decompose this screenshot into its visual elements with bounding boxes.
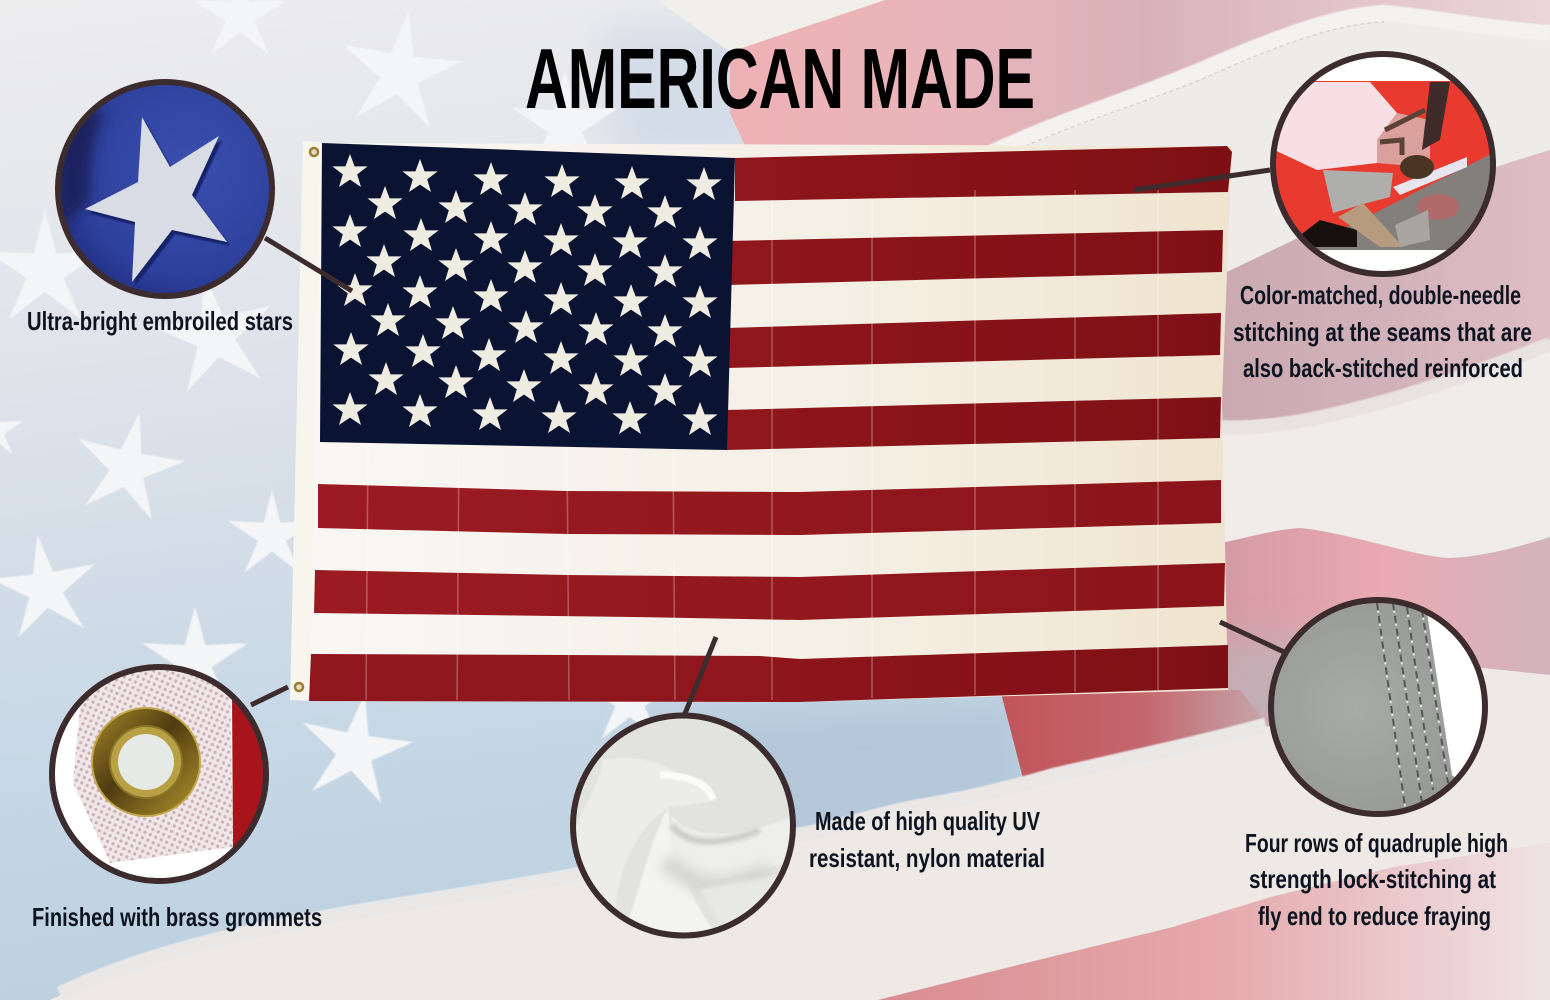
connector line — [684, 637, 716, 716]
callout: brass grommets — [32, 664, 322, 932]
icon: brass grommet photo — [55, 670, 263, 878]
flag: fold creases — [366, 190, 1158, 700]
connector line — [1220, 622, 1284, 652]
background: top-right pink band — [730, 0, 1550, 170]
icon: embroidered star photo — [61, 85, 269, 293]
connector line — [251, 687, 288, 705]
caption: Made of high quality UV — [815, 806, 1041, 836]
background: red patch under flag — [1001, 690, 1280, 790]
background: middle white band — [1210, 340, 1550, 558]
background: lower white fabric — [50, 668, 1550, 1000]
caption — [1233, 280, 1532, 383]
background: faded embroidered stars — [0, 0, 676, 807]
callout: nylon material — [568, 637, 1045, 940]
background: stitched seam — [60, 725, 1266, 994]
icon: white fabric photo — [576, 718, 790, 932]
callout: lock-stitching at fly end — [1220, 597, 1508, 931]
flag: white field — [310, 143, 1232, 702]
connector line — [1134, 170, 1270, 190]
title: AMERICAN MADE — [525, 32, 1035, 127]
flag: blue canton — [320, 143, 735, 450]
American flag — [290, 141, 1232, 702]
background: lower pink band — [1210, 528, 1550, 730]
caption — [1245, 828, 1508, 931]
caption — [809, 806, 1045, 873]
caption: Finished with brass grommets — [32, 902, 322, 932]
callout: double-needle stitching — [1134, 52, 1532, 383]
icon: sewing machine photo — [1276, 57, 1490, 271]
flag: red stripes — [309, 146, 1232, 702]
caption: Ultra-bright embroiled stars — [27, 306, 293, 336]
caption: resistant, nylon material — [809, 843, 1045, 873]
background: top cream stripe — [650, 0, 905, 52]
background: bottom-right pink band — [878, 843, 1550, 1000]
callout: embroidered stars — [27, 79, 352, 336]
flag: stars — [332, 154, 722, 435]
flag: grommets — [295, 148, 318, 691]
connector line — [265, 238, 352, 291]
icon: gray stitched fabric photo — [1274, 603, 1482, 811]
flag: hoist header strip — [290, 141, 322, 701]
background: middle pink band — [1210, 150, 1550, 430]
background: upper white band — [991, 13, 1550, 300]
